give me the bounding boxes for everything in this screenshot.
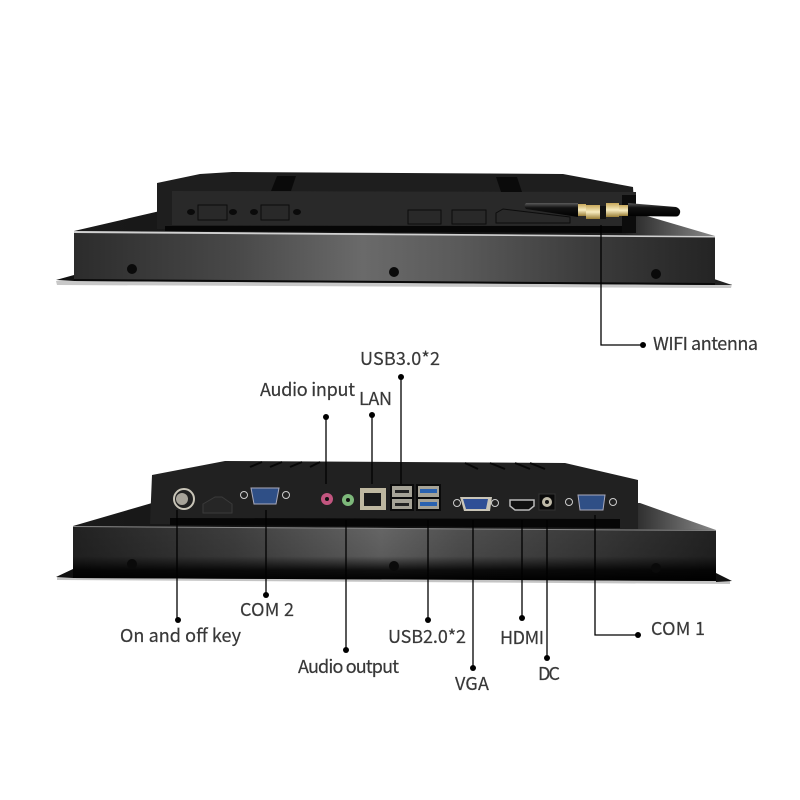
- callout: HDMI: HDMI: [500, 624, 544, 650]
- icon: LAN port: [360, 488, 386, 510]
- icon: VGA port: [454, 497, 498, 511]
- callout: COM 1: COM 1: [651, 615, 705, 641]
- callout: HDMI: [500, 520, 544, 650]
- rear slope: [74, 211, 715, 282]
- bezel side face: [74, 231, 715, 285]
- callout: LAN: [359, 385, 392, 484]
- callout: Audio input: [260, 376, 355, 484]
- top panel: device rear view with antenna: [56, 172, 732, 288]
- vents: [250, 462, 545, 469]
- callout: USB2.0*2: USB2.0*2: [388, 623, 466, 649]
- icon: COM 2 port: [240, 488, 290, 504]
- silver front frame: [56, 281, 732, 288]
- callout: Audio input: Audio input: [260, 376, 355, 402]
- case straps: [271, 176, 296, 191]
- callout: COM 1: [595, 515, 705, 641]
- callout: USB2.0*2: [388, 520, 466, 649]
- callout: DC: DC: [538, 660, 560, 686]
- icon: DC jack: [539, 494, 555, 510]
- icon: USB 3.0 stacked: [416, 484, 441, 511]
- bottom panel: device I/O view: [56, 461, 732, 584]
- icon: audio input: [321, 493, 333, 505]
- outlined blank ports: [198, 205, 570, 224]
- callout: WIFI antenna: WIFI antenna: [653, 330, 758, 356]
- icon: COM 1 port: [566, 495, 616, 510]
- callout: Audio output: Audio output: [298, 653, 399, 679]
- callout: On and off key: [120, 510, 242, 648]
- rear case: [150, 461, 638, 529]
- blank port: [203, 497, 232, 513]
- callout: Audio output: [298, 520, 399, 679]
- bezel screws: [127, 559, 137, 569]
- bezel screws: [127, 264, 137, 274]
- icon: HDMI port: [510, 500, 534, 510]
- callout: DC: [538, 520, 560, 686]
- rear slope: [73, 503, 716, 575]
- icon: power key: [174, 489, 194, 509]
- icon: WIFI antenna: [524, 203, 680, 219]
- icon: USB 2.0 stacked: [390, 484, 414, 511]
- callout: COM 2: COM 2: [240, 596, 294, 622]
- callout: VGA: [455, 520, 489, 696]
- callout: USB3.0*2: [360, 345, 440, 484]
- callout: On and off key: On and off key: [120, 622, 242, 648]
- callout: LAN: LAN: [359, 385, 392, 411]
- silver front frame: [57, 577, 730, 584]
- callout: VGA: VGA: [455, 670, 489, 696]
- callout: WIFI antenna: [601, 225, 758, 356]
- rear case: [157, 172, 636, 233]
- bezel side face: [73, 526, 716, 581]
- callout: USB3.0*2: USB3.0*2: [360, 345, 440, 371]
- callout: COM 2: [240, 510, 294, 622]
- icon: audio output: [342, 494, 354, 506]
